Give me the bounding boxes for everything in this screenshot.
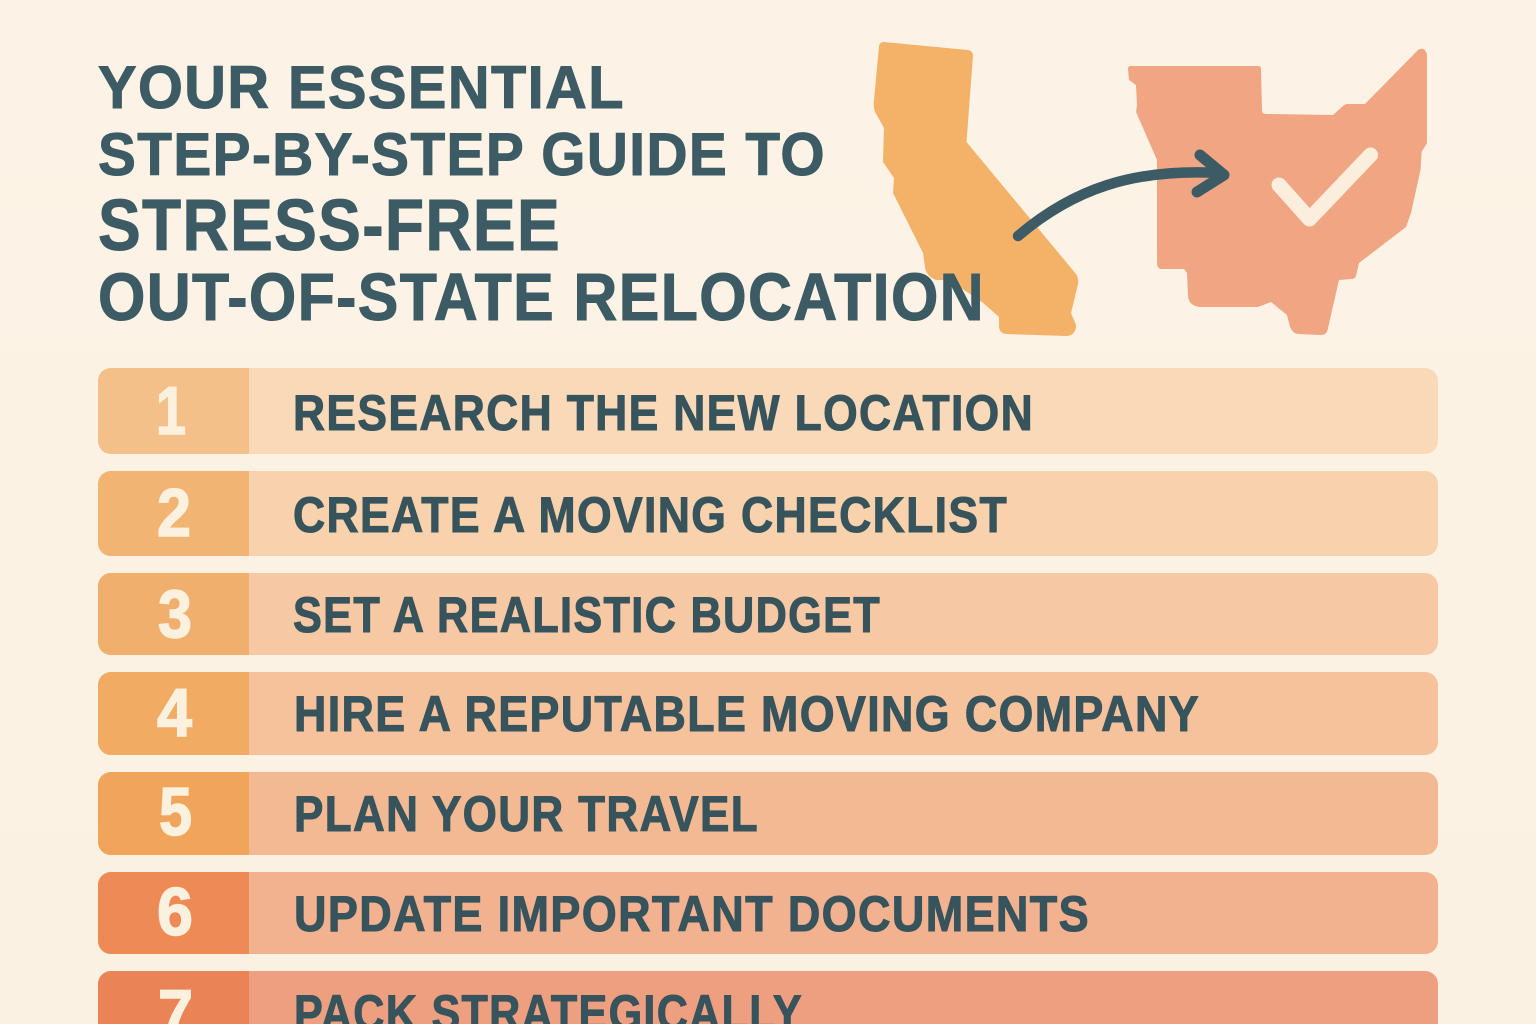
step 4 row [98,672,1438,755]
step 3 row: 3 [158,576,192,652]
icon: Ohio state shape [1128,49,1427,335]
step 2 row: 2 [157,475,191,551]
step 5 row [98,772,1438,855]
step 2 row [98,471,1438,556]
step 5 row: PLAN YOUR TRAVEL [294,786,759,842]
icon: check mark [1279,155,1370,219]
step 6 row: UPDATE IMPORTANT DOCUMENTS [294,886,1090,942]
step 1 row: 1 [156,373,186,449]
title [98,54,985,335]
step 7 row [98,971,1438,1024]
step 3 row [98,573,1438,655]
step 4 row: HIRE A REPUTABLE MOVING COMPANY [294,686,1200,742]
arrow: from California to Ohio [1018,155,1224,236]
step 6 row [98,872,1438,954]
step 1 row [98,368,1438,454]
icon: California state shape [874,42,1078,336]
step 3 row: SET A REALISTIC BUDGET [293,587,881,643]
title: OUT-OF-STATE RELOCATION [98,260,985,335]
step 1 row: RESEARCH THE NEW LOCATION [293,385,1034,441]
step 2 row: CREATE A MOVING CHECKLIST [293,487,1008,543]
step 4 row: 4 [157,675,192,751]
step 5 row: 5 [159,774,192,850]
step 6 row: 6 [157,874,193,950]
title: STEP-BY-STEP GUIDE TO [98,121,826,188]
title: STRESS-FREE [98,186,561,266]
title: YOUR ESSENTIAL [98,54,625,121]
